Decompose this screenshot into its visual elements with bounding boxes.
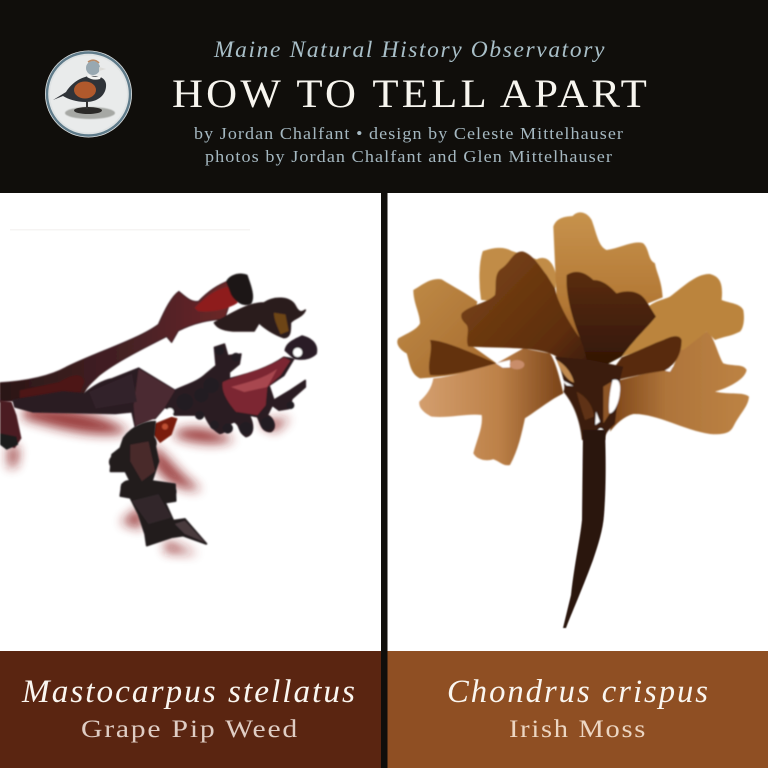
logo: harlequin duck medallion	[45, 50, 132, 138]
seaweed: upper branch	[0, 274, 317, 402]
common name: Irish Moss	[509, 716, 647, 743]
tip ring	[284, 335, 317, 360]
top knob	[226, 274, 253, 305]
stalk junction	[555, 357, 623, 440]
seaweed: Chondrus stipe	[563, 430, 606, 628]
seaweed: lower branch	[13, 344, 305, 443]
panel: Mastocarpus photo	[0, 193, 381, 651]
seaweed: Chondrus fronds	[397, 212, 749, 465]
cast shadows	[8, 408, 290, 554]
panel: Chondrus photo	[388, 193, 768, 651]
credits line 1: by Jordan Chalfant • design by Celeste Mittelhauser	[194, 124, 624, 143]
panel: Chondrus label	[388, 651, 768, 768]
org name: Maine Natural History Observatory	[213, 37, 606, 62]
header band	[0, 0, 768, 193]
common name: Grape Pip Weed	[81, 716, 299, 743]
seaweed: left stub and descending sprig	[0, 400, 206, 545]
title: HOW TO TELL APART	[172, 71, 650, 116]
center divider	[381, 192, 388, 768]
scientific name: Mastocarpus stellatus	[21, 674, 357, 710]
scientific name: Chondrus crispus	[447, 674, 710, 710]
panel: Mastocarpus label	[0, 651, 381, 768]
credits line 2: photos by Jordan Chalfant and Glen Mittelhauser	[205, 147, 613, 166]
